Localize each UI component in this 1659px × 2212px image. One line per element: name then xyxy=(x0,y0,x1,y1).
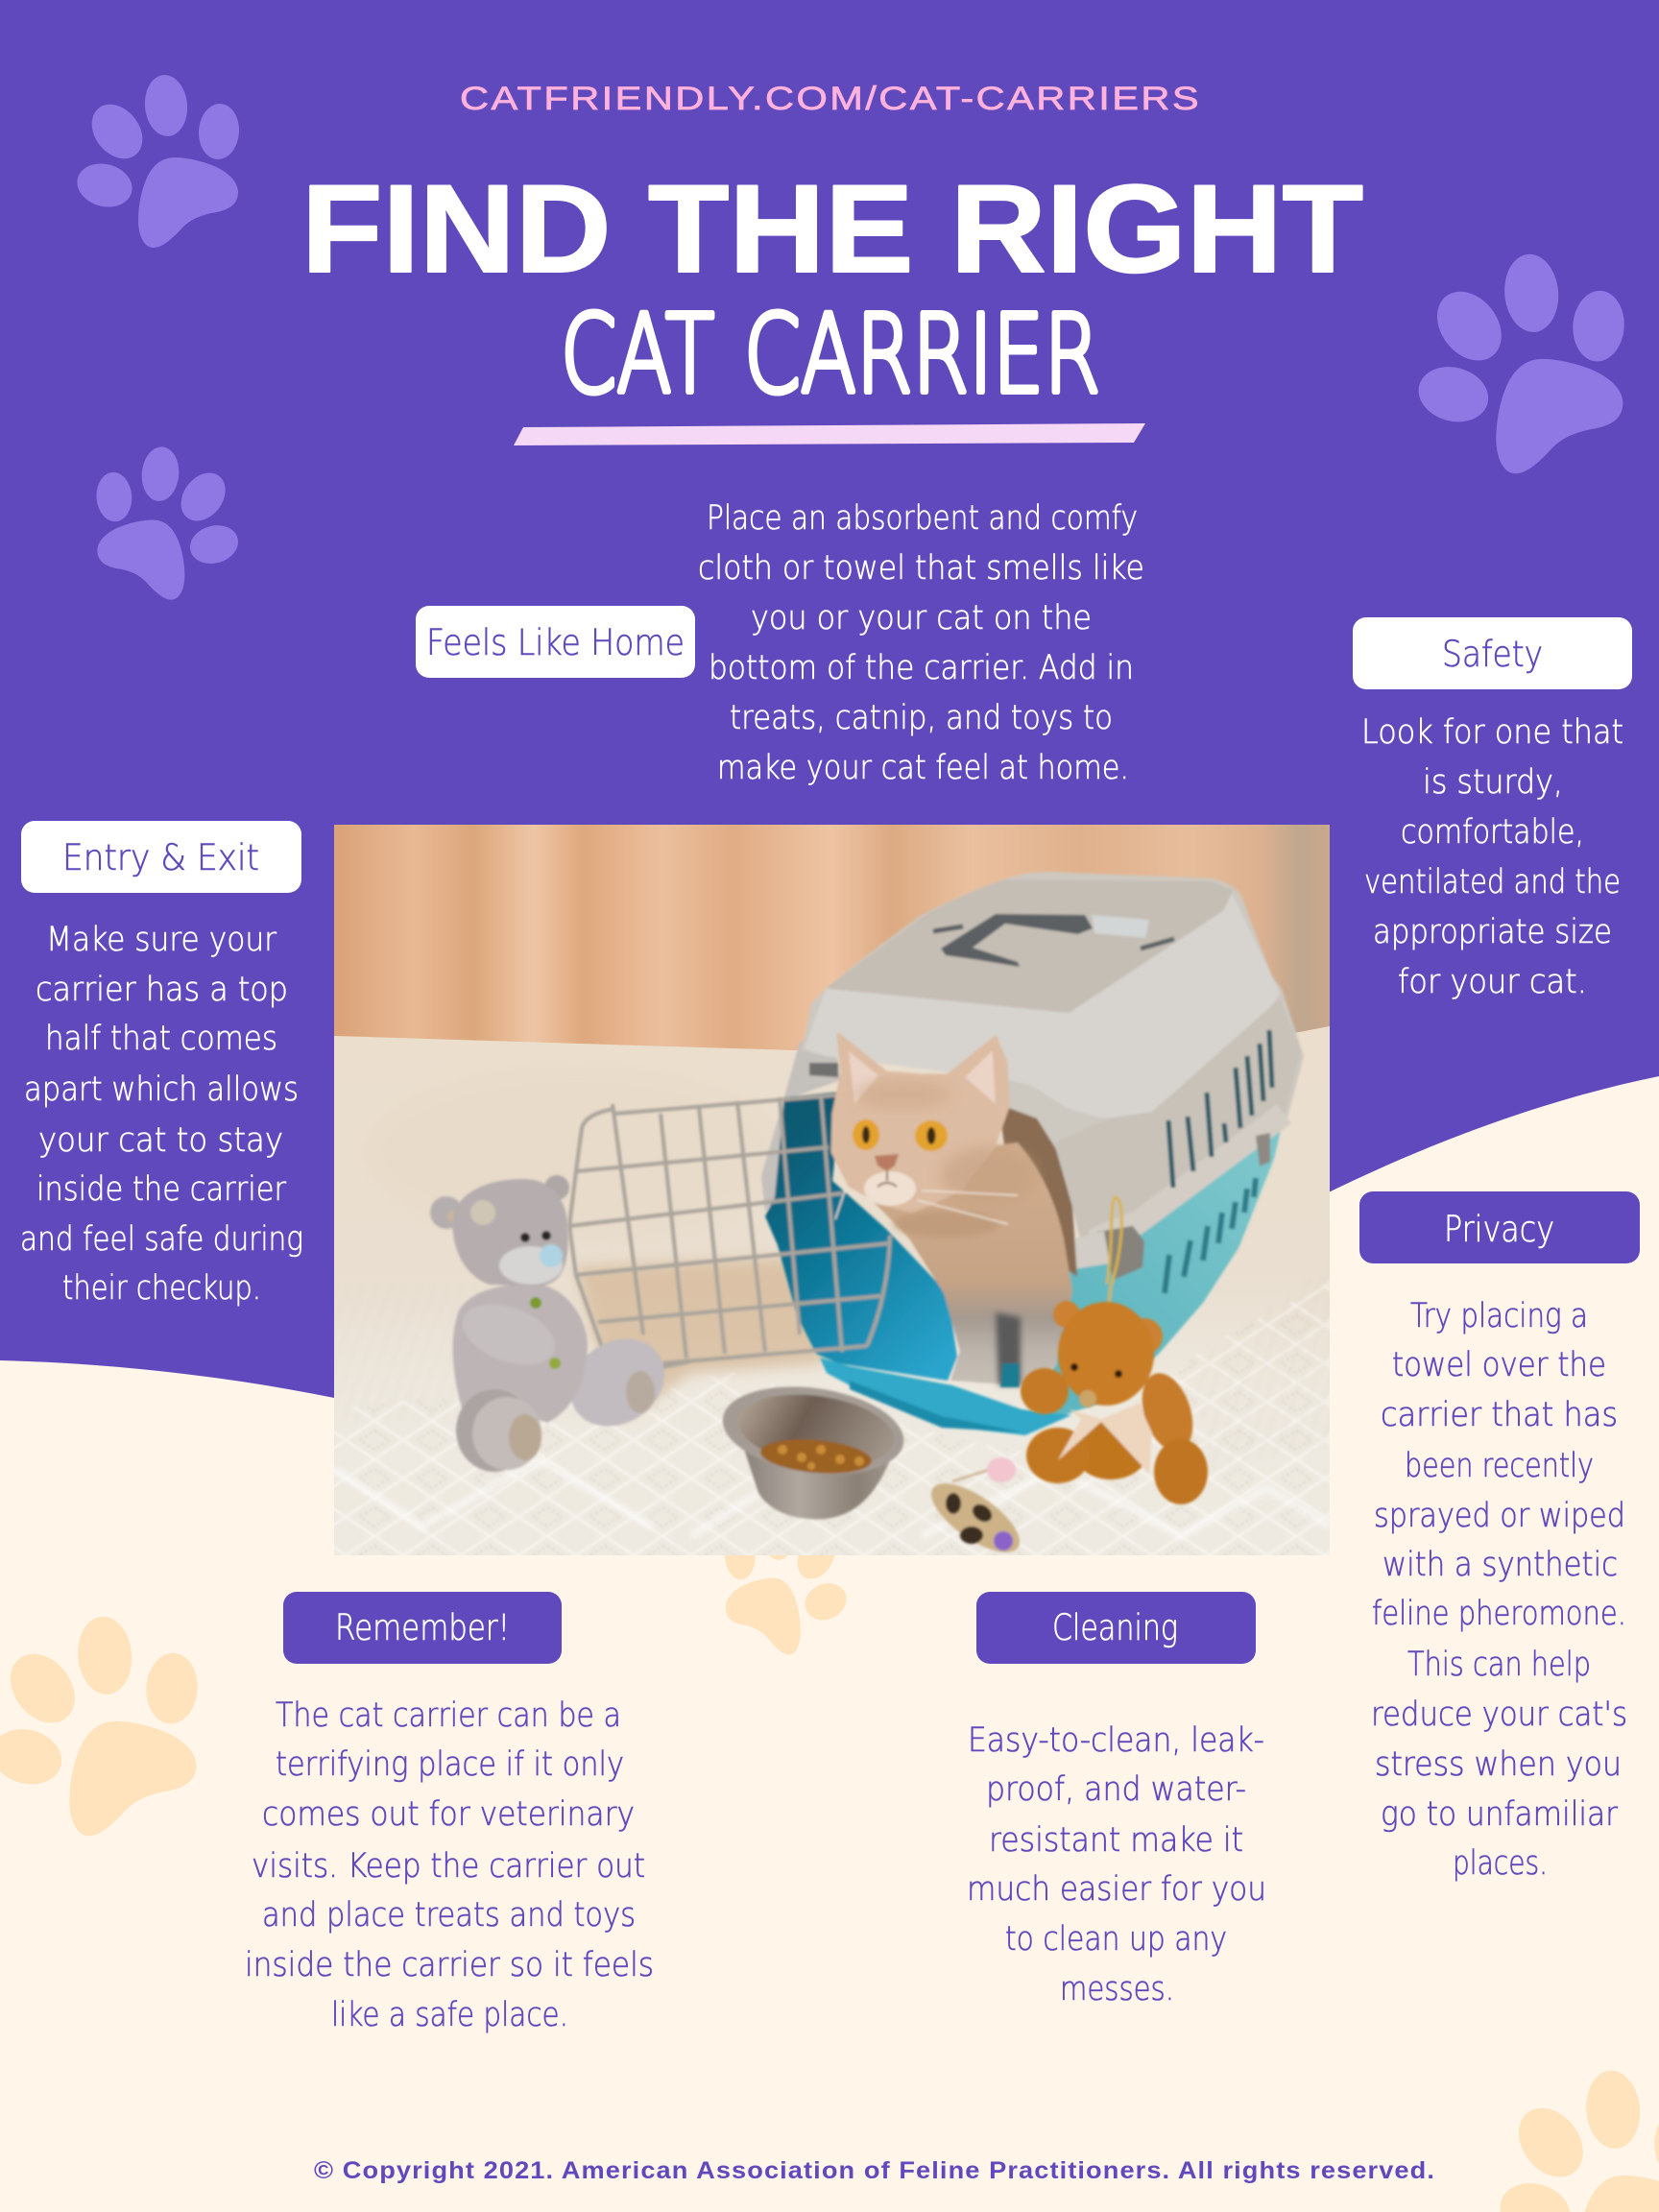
carrier vents xyxy=(1168,1030,1272,1188)
photo grey teddy xyxy=(430,1175,682,1472)
subtitle: CAT xyxy=(561,293,714,418)
panel: remember: Remember! xyxy=(335,1607,510,1648)
panel: entry and exit: your cat to stay xyxy=(38,1121,283,1160)
carrier latches xyxy=(1097,1226,1144,1280)
panel: feels like home: cloth or towel that smells like xyxy=(698,549,1144,588)
panel: feels like home: Place an absorbent and comfy xyxy=(707,499,1138,538)
carrier string xyxy=(1107,1197,1121,1304)
panel: entry and exit xyxy=(20,821,303,1308)
panel: remember: terrifying place if it only xyxy=(276,1745,624,1784)
cat head xyxy=(832,1034,1008,1212)
panel: feels like home: bottom of the carrier. Add in xyxy=(709,649,1134,687)
carrier door xyxy=(569,1094,890,1373)
panel: safety xyxy=(1353,617,1632,1001)
shadow behind door xyxy=(576,1258,828,1421)
icon: paw left middle xyxy=(95,445,242,600)
panel: cleaning: much easier for you xyxy=(967,1870,1266,1909)
carrier handle xyxy=(941,914,1093,967)
panel: privacy: sprayed or wiped xyxy=(1374,1497,1625,1535)
panel: entry and exit: half that comes xyxy=(45,1020,277,1058)
panel: safety: is sturdy, xyxy=(1423,763,1563,802)
website url: CATFRIENDLY.COM/CAT-CARRIERS xyxy=(460,81,1201,117)
subtitle xyxy=(561,293,1100,418)
carrier floor rim xyxy=(820,1358,1071,1435)
panel: entry and exit: Make sure your xyxy=(46,921,277,959)
panel: cleaning: messes. xyxy=(1060,1970,1174,2008)
cat body xyxy=(867,1142,1072,1385)
photo: cat in carrier xyxy=(325,815,1339,1565)
panel: privacy: carrier that has xyxy=(1381,1396,1618,1434)
photo carrier and cat xyxy=(569,872,1304,1435)
panel: entry and exit: inside the carrier xyxy=(36,1170,287,1209)
panel: privacy: This can help xyxy=(1407,1646,1591,1684)
photo curtain xyxy=(325,815,1339,1055)
carrier band xyxy=(1073,1011,1267,1237)
icon: paw bottom left xyxy=(0,1614,200,1836)
panel: remember: inside the carrier so it feels xyxy=(245,1946,654,1984)
panel: feels like home xyxy=(416,499,1144,787)
panel: cleaning: to clean up any xyxy=(1005,1920,1227,1959)
photo orange teddy xyxy=(1021,1301,1208,1504)
cream wave background xyxy=(0,1076,1659,2212)
panel: privacy: towel over the xyxy=(1392,1346,1606,1384)
panel: privacy: Try placing a xyxy=(1410,1297,1588,1335)
title: FIND THE RIGHT xyxy=(301,158,1363,299)
photo toy mouse xyxy=(921,1457,1030,1565)
panel: cleaning xyxy=(967,1592,1266,2008)
panel: safety: Safety xyxy=(1442,634,1543,675)
panel: safety: comfortable, xyxy=(1401,813,1584,852)
footer copyright: © Copyright 2021. American Association of Feline Practitioners. All rights reserved. xyxy=(314,2157,1435,2184)
subtitle underline xyxy=(514,423,1145,445)
panel: feels like home: treats, catnip, and toys to xyxy=(730,699,1113,737)
panel: cleaning: Cleaning xyxy=(1052,1607,1178,1648)
panel: cleaning: resistant make it xyxy=(989,1821,1243,1860)
panel: feels like home: make your cat feel at home. xyxy=(717,749,1129,787)
panel: entry and exit: apart which allows xyxy=(24,1070,299,1109)
panel: remember: like a safe place. xyxy=(331,1996,568,2034)
icon: paw top left xyxy=(72,73,241,248)
panel: entry and exit: and feel safe during xyxy=(20,1220,303,1259)
panel: privacy: go to unfamiliar xyxy=(1381,1795,1619,1834)
icon: paw under photo xyxy=(724,1506,850,1655)
cat eyes xyxy=(853,1119,879,1150)
carrier interior xyxy=(765,1092,957,1381)
panel: remember: visits. Keep the carrier out xyxy=(252,1847,645,1886)
panel: cleaning: Easy-to-clean, leak- xyxy=(968,1721,1264,1760)
panel: remember: comes out for veterinary xyxy=(262,1795,635,1834)
panel: privacy: Privacy xyxy=(1444,1209,1554,1250)
panel: privacy: with a synthetic xyxy=(1382,1546,1618,1584)
panel: entry and exit: Entry & Exit xyxy=(62,837,259,878)
icon: paw bottom right xyxy=(1494,2068,1659,2212)
panel: cleaning: proof, and water- xyxy=(986,1770,1246,1809)
carrier lower teal xyxy=(1046,1114,1285,1421)
carrier upper panel xyxy=(805,891,1280,1119)
panel: privacy: stress when you xyxy=(1375,1745,1622,1784)
teddy foot xyxy=(571,1338,664,1427)
panel: entry and exit: their checkup. xyxy=(62,1269,261,1308)
cat muzzle and nose xyxy=(864,1171,916,1206)
panel: safety: Look for one that xyxy=(1361,713,1623,752)
photo bedding xyxy=(325,1026,1339,1565)
panel: privacy: been recently xyxy=(1405,1447,1594,1485)
panel: privacy xyxy=(1359,1191,1640,1883)
carrier upper grey xyxy=(803,871,1304,1167)
icon: paw top right xyxy=(1412,252,1626,473)
carrier left lip xyxy=(761,1037,840,1212)
panel: privacy: reduce your cat's xyxy=(1371,1695,1627,1734)
panel: feels like home: Feels Like Home xyxy=(426,622,685,663)
panel: safety: for your cat. xyxy=(1398,963,1587,1001)
panel: feels like home: you or your cat on the xyxy=(751,599,1092,637)
panel: safety: appropriate size xyxy=(1373,913,1612,951)
subtitle: CARRIER xyxy=(744,293,1100,418)
panel: remember: The cat carrier can be a xyxy=(276,1696,621,1735)
panel: entry and exit: carrier has a top xyxy=(36,971,288,1009)
carrier lid xyxy=(830,881,1231,1011)
panel: privacy: places. xyxy=(1453,1844,1548,1883)
cat shadow inside arch xyxy=(998,1104,1077,1277)
panel: remember: and place treats and toys xyxy=(262,1896,636,1935)
photo food bowl xyxy=(717,1376,909,1519)
panel: remember xyxy=(245,1592,654,2034)
